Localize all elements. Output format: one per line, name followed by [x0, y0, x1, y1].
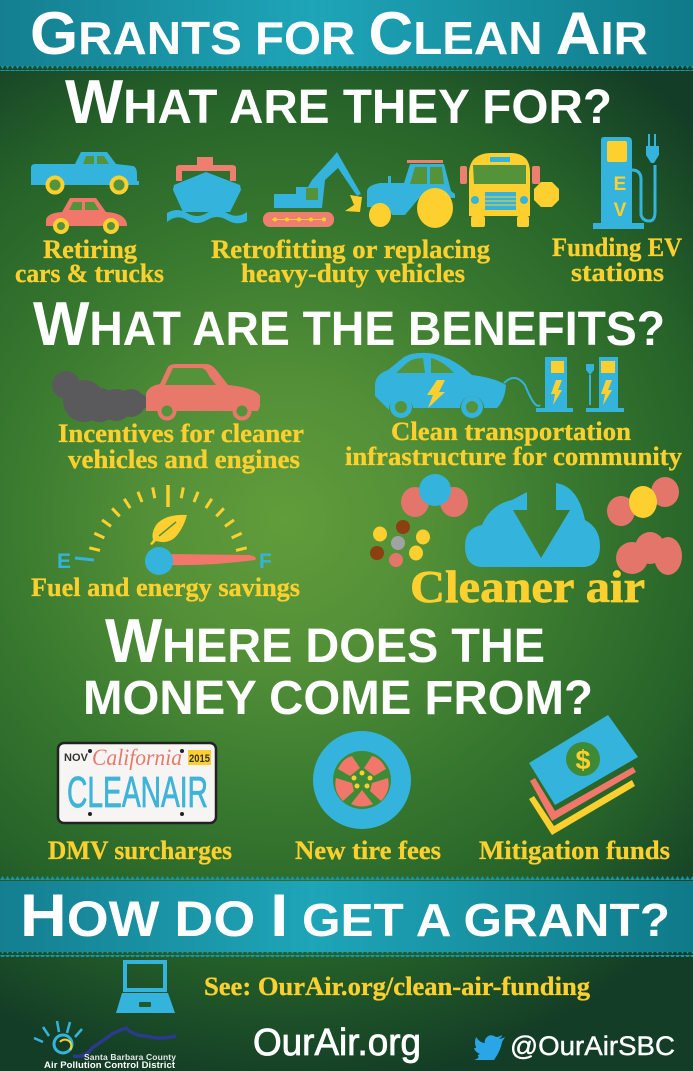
icon: license plate: 2015: [189, 753, 210, 765]
label: funding EV stations: Funding EV: [552, 233, 682, 262]
label: retrofitting: [211, 235, 490, 288]
icon: EV charging pump: V: [614, 200, 627, 221]
icon: excavator: [263, 152, 362, 227]
heading: HOW DO I GET A GRANT?: [20, 882, 670, 949]
label: fuel savings: Fuel and energy savings: [31, 573, 300, 602]
heading: what are the benefits: WHAT ARE THE BENEFITS?: [33, 290, 665, 359]
icon: pickup truck: [31, 152, 139, 192]
icon: polluting car with smoke: [52, 364, 260, 422]
icon: license plate: NOV: [64, 752, 89, 764]
icon: school bus: [460, 153, 559, 227]
icon: laptop: [116, 960, 175, 1013]
label: incentives: vehicles and engines: [68, 445, 300, 474]
icon: twitter bird: [474, 1035, 505, 1060]
label: DMV surcharges: DMV surcharges: [48, 836, 232, 865]
label: retrofitting: Retrofitting or replacing: [211, 235, 490, 264]
label: clean transportation: infrastructure for community: [345, 442, 682, 471]
icon: money stack: $: [575, 745, 591, 775]
title: GRANTS FOR CLEAN AIR: [30, 0, 648, 67]
panel: what are they for icons: [31, 134, 659, 232]
logo: air pollution control district: Air Pollution Control District: [44, 1060, 176, 1071]
label: incentives: Incentives for cleaner: [58, 419, 304, 448]
heading: what are they for: WHAT ARE THEY FOR?: [65, 68, 612, 137]
icon: ship: [167, 157, 247, 223]
icon: license plate: CLEANAIR: [67, 768, 208, 817]
label: clean transportation: [345, 417, 682, 471]
label: cleaner air: Cleaner air: [410, 561, 645, 612]
icon: tractor: [367, 160, 455, 228]
label: funding EV stations: [552, 233, 682, 287]
banner: how do I get a grant: [0, 876, 693, 957]
text: twitter handle: @OurAirSBC: [510, 1031, 675, 1061]
heading: where does the money come from: MONEY COME FROM?: [83, 672, 593, 725]
label: funding EV stations: stations: [571, 258, 664, 287]
icon: fuel gauge: [57, 485, 272, 575]
label: new tire fees: New tire fees: [295, 836, 441, 865]
label: mitigation funds: Mitigation funds: [479, 836, 670, 865]
label: retiring cars and trucks: Retiring: [43, 235, 137, 264]
heading: where does the money come from: WHERE DOES THE: [105, 607, 545, 676]
icon: cloud with down arrow and molecules: [370, 474, 682, 575]
icon: tire: [313, 731, 411, 829]
text: website link: See: OurAir.org/clean-air-funding: [204, 972, 590, 1001]
logo: air pollution control district: [34, 1021, 176, 1071]
heading: where does the money come from: [83, 607, 593, 725]
label: retiring cars and trucks: [15, 235, 164, 288]
text: OurAir.org: OurAir.org: [253, 1022, 421, 1064]
icon: license plate: [58, 743, 216, 823]
icon: fuel gauge: F: [259, 550, 272, 573]
icon: EV charging pump: E: [614, 174, 626, 195]
label: retrofitting: heavy-duty vehicles: [241, 259, 465, 288]
icon: money stack: [529, 715, 638, 835]
icon: EV charging pump: [593, 134, 659, 229]
label: clean transportation: Clean transportation: [391, 417, 632, 446]
logo: air pollution control district: Santa Barbara County: [84, 1052, 176, 1062]
icon: red car: [46, 198, 127, 232]
icon: fuel gauge: E: [57, 550, 71, 573]
icon: license plate: California: [92, 745, 182, 770]
top banner: [0, 0, 693, 71]
icon: electric car at chargers: [375, 353, 624, 416]
label: retiring cars and trucks: cars & trucks: [15, 259, 164, 288]
label: incentives: [58, 419, 304, 474]
